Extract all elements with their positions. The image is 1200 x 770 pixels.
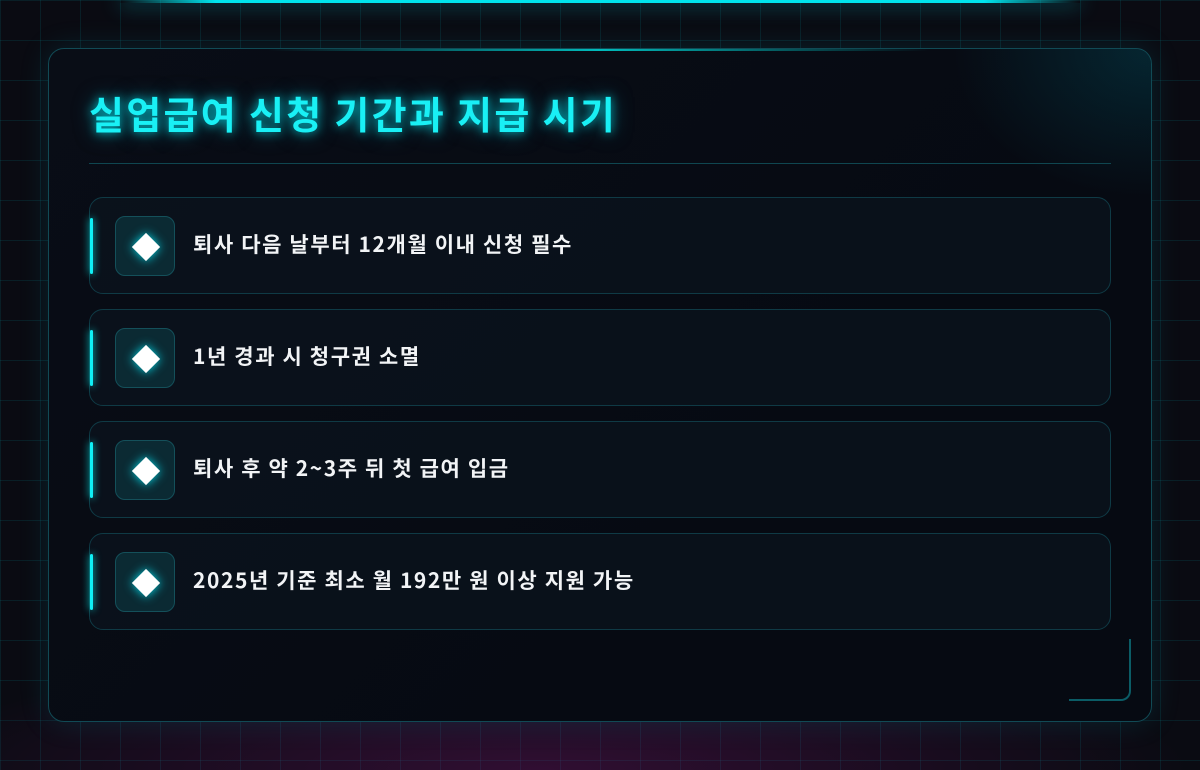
item 1: 퇴사 다음 날부터 12개월 이내 신청 필수 <box>193 229 573 259</box>
item 3: 퇴사 후 약 2~3주 뒤 첫 급여 입금 <box>193 453 510 483</box>
item 4 <box>89 533 1111 630</box>
title: 실업급여 신청 기간과 지급 시기 <box>89 85 617 140</box>
item 4: 2025년 기준 최소 월 192만 원 이상 지원 가능 <box>193 565 635 595</box>
item 1 <box>89 197 1111 294</box>
item 2: 1년 경과 시 청구권 소멸 <box>193 341 421 371</box>
corner decoration <box>1069 639 1131 701</box>
item 3 <box>89 421 1111 518</box>
item 2 <box>89 309 1111 406</box>
